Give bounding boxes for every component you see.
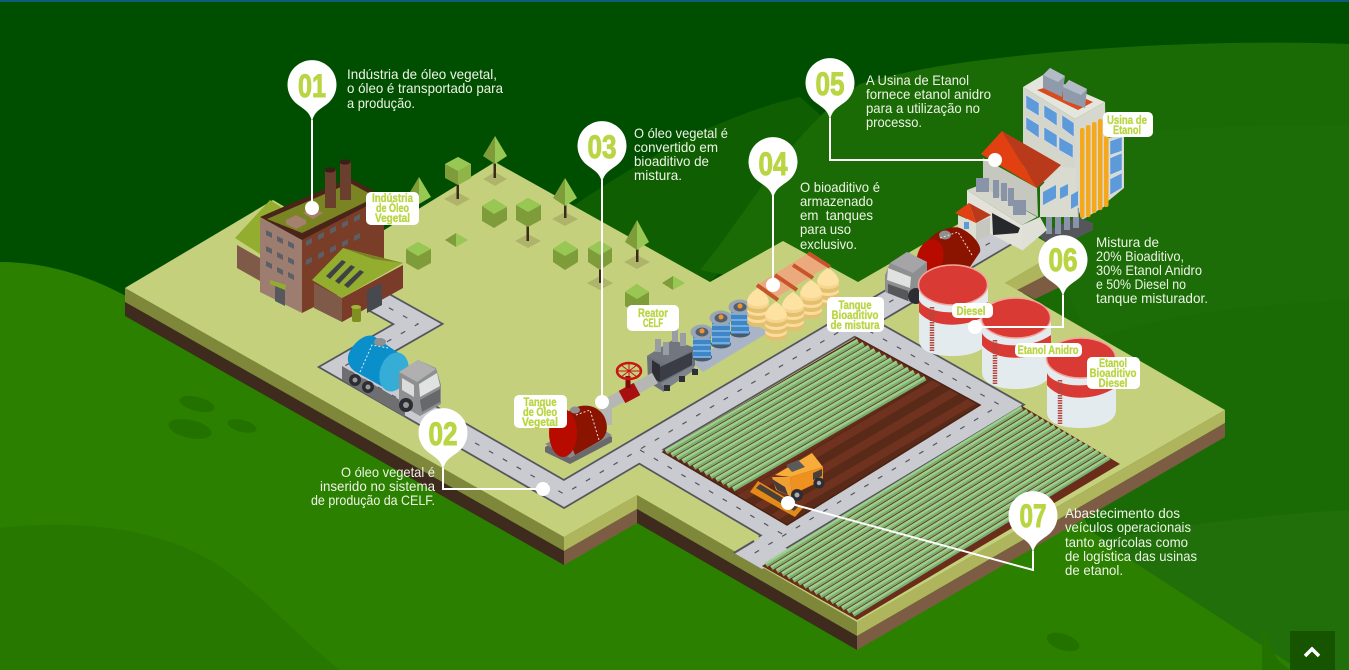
text: step 06: 30% Etanol Anidro bbox=[1096, 262, 1202, 278]
factory: vegetable oil industry bbox=[235, 159, 403, 322]
pin 05 bbox=[806, 58, 1002, 167]
text: step 06 bbox=[1096, 234, 1208, 306]
label: Tanque de Óleo Vegetal: Tanque bbox=[524, 395, 557, 409]
text: step 07: de logística das usinas bbox=[1065, 548, 1197, 564]
storage tank: anhydrous ethanol bbox=[982, 298, 1051, 389]
harvester bbox=[750, 453, 824, 517]
text: step 06: Mistura de bbox=[1096, 234, 1159, 250]
text: step 04: em tanques bbox=[800, 207, 873, 223]
label: Tanque Bioaditivo de mistura: Tanque bbox=[838, 298, 872, 312]
back-to-top button bbox=[1290, 631, 1335, 670]
text: step 07: de etanol. bbox=[1065, 562, 1123, 578]
label: Usina de Etanol: Usina de bbox=[1107, 113, 1147, 127]
pipe and valve bbox=[606, 363, 655, 425]
label: Tanque Bioaditivo de mistura bbox=[827, 297, 884, 332]
isometric platform bbox=[125, 162, 1225, 650]
label: Tanque Bioaditivo de mistura: Bioaditivo bbox=[832, 308, 878, 322]
text: step 04 bbox=[800, 179, 880, 252]
text: step 01: a produção. bbox=[347, 95, 415, 111]
trees and bushes bbox=[406, 136, 685, 313]
text: step 02: de produção da CELF. bbox=[311, 492, 435, 508]
label: Etanol Bioaditivo Diesel bbox=[1087, 356, 1140, 390]
text: step 07: tanto agrícolas como bbox=[1065, 534, 1188, 550]
pin 02 bbox=[418, 408, 550, 496]
label: Tanque de Óleo Vegetal: Vegetal bbox=[522, 415, 558, 429]
text: step 03: convertido em bbox=[634, 139, 718, 155]
label: Tanque de Óleo Vegetal: de Óleo bbox=[523, 404, 557, 419]
label: Reator CELF bbox=[627, 305, 679, 331]
storage tank: ethanol bioadditive diesel bbox=[1046, 338, 1116, 428]
label: Etanol Bioaditivo Diesel: Diesel bbox=[1098, 376, 1128, 390]
label: Etanol Bioaditivo Diesel: Etanol bbox=[1099, 356, 1127, 370]
label: Indústria de Óleo Vegetal: de Óleo bbox=[376, 200, 409, 215]
ethanol plant bbox=[955, 68, 1124, 251]
text: step 02 bbox=[311, 464, 435, 508]
text: step 05 bbox=[866, 72, 991, 130]
red tanker truck bbox=[885, 227, 980, 304]
connector lines bbox=[312, 118, 1063, 570]
roads bbox=[343, 231, 1010, 569]
text: step 03: O óleo vegetal é bbox=[634, 125, 728, 141]
text: step 03: bioaditivo de bbox=[634, 153, 709, 169]
blue tanker truck bbox=[342, 335, 441, 417]
pin 05: 05 bbox=[816, 66, 844, 102]
field 2 bbox=[762, 406, 1120, 620]
pin 04: 04 bbox=[758, 146, 788, 182]
field 1 bbox=[663, 338, 980, 525]
text: step 06: e 50% Diesel no bbox=[1096, 276, 1186, 292]
text: step 07 bbox=[1065, 505, 1197, 578]
label: Tanque Bioaditivo de mistura: de mistura bbox=[830, 318, 880, 332]
text: step 07: veículos operacionais bbox=[1065, 519, 1191, 535]
red oil tank bbox=[545, 406, 612, 464]
label: Reator CELF: CELF bbox=[643, 316, 663, 330]
label: Tanque de Óleo Vegetal bbox=[514, 395, 567, 429]
text: step 01: Indústria de óleo vegetal, bbox=[347, 66, 497, 82]
text: step 05: A Usina de Etanol bbox=[866, 72, 969, 88]
label: Diesel: Diesel bbox=[956, 304, 986, 318]
text: step 02: inserido no sistema bbox=[320, 478, 435, 494]
text: step 05: processo. bbox=[866, 114, 922, 130]
label: Usina de Etanol: Etanol bbox=[1113, 123, 1141, 137]
text: step 05: para a utilização no bbox=[866, 100, 980, 116]
text: step 03 bbox=[634, 125, 728, 183]
text: step 04: O bioaditivo é bbox=[800, 179, 880, 195]
pin 03 bbox=[578, 121, 626, 409]
text: step 07: Abastecimento dos bbox=[1065, 505, 1180, 521]
text: step 01: o óleo é transportado para bbox=[347, 80, 503, 96]
label: Indústria de Óleo Vegetal: Indústria bbox=[372, 191, 413, 205]
text: step 01 bbox=[347, 66, 503, 111]
label: Etanol Bioaditivo Diesel: Bioaditivo bbox=[1090, 366, 1136, 380]
pin 06 bbox=[968, 235, 1088, 334]
label: Indústria de Óleo Vegetal: Vegetal bbox=[375, 211, 410, 225]
storage tank: diesel bbox=[918, 265, 988, 356]
text: step 06: tanque misturador. bbox=[1096, 290, 1208, 306]
pin 04 bbox=[748, 137, 797, 292]
text: step 05: fornece etanol anidro bbox=[866, 86, 991, 102]
bioadditive storage tanks bbox=[747, 252, 839, 341]
text: step 04: para uso bbox=[800, 221, 851, 237]
label: Etanol Anidro: Etanol Anidro bbox=[1018, 343, 1078, 357]
pin 07: 07 bbox=[1020, 498, 1046, 534]
CELF reactor bbox=[647, 300, 769, 392]
pin 07 bbox=[781, 491, 1057, 553]
pin 01 bbox=[288, 60, 336, 215]
text: step 03: mistura. bbox=[634, 167, 682, 183]
pin 06: 06 bbox=[1048, 242, 1078, 278]
pin 01: 01 bbox=[298, 68, 326, 104]
pin 03: 03 bbox=[588, 129, 616, 165]
text: step 06: 20% Bioaditivo, bbox=[1096, 248, 1184, 264]
label: Indústria de Óleo Vegetal bbox=[366, 191, 419, 225]
label: Usina de Etanol bbox=[1103, 112, 1153, 137]
label: Reator CELF: Reator bbox=[638, 306, 668, 320]
pin 02: 02 bbox=[428, 416, 458, 452]
text: step 04: exclusivo. bbox=[800, 236, 857, 252]
text: step 04: armazenado bbox=[800, 193, 873, 209]
text: step 02: O óleo vegetal é bbox=[341, 464, 435, 480]
